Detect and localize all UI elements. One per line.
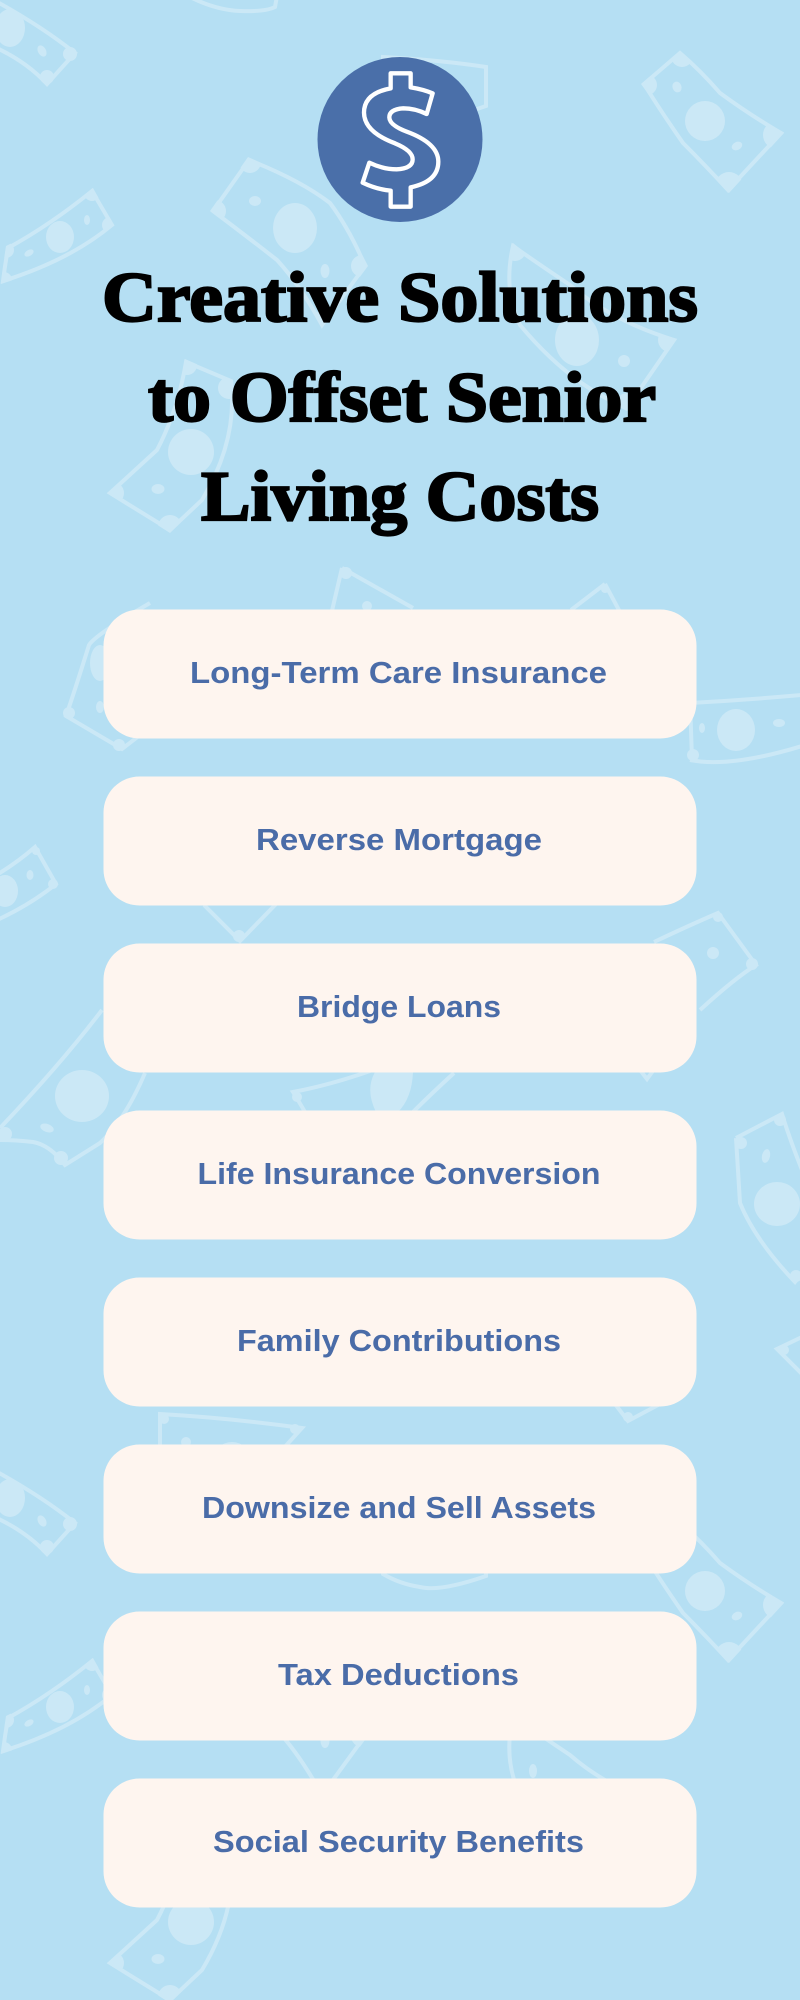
card: Reverse Mortgage [104,776,696,906]
title: to Offset Senior [148,359,656,437]
card: Tax Deductions [104,1612,696,1740]
card: Life Insurance Conversion [104,1110,696,1240]
card: Tax Deductions: Tax Deductions [278,1657,519,1692]
card: Life Insurance Conversion: Life Insurance Conversion [198,1156,600,1191]
icon: dollar sign in circle [318,57,482,222]
title: Living Costs [201,458,599,536]
card: Long-Term Care Insurance: Long-Term Care Insurance [190,655,607,690]
card: Family Contributions [104,1278,696,1406]
title: Creative Solutions [102,259,698,337]
card: Bridge Loans: Bridge Loans [297,989,501,1024]
card: Family Contributions: Family Contributions [237,1323,561,1358]
title [102,259,698,536]
card: Long-Term Care Insurance [104,610,696,738]
card: Reverse Mortgage: Reverse Mortgage [256,822,542,857]
card: Downsize and Sell Assets: Downsize and Sell Assets [202,1490,596,1525]
card: Social Security Benefits [104,1778,696,1908]
card: Social Security Benefits: Social Security Benefits [213,1824,584,1859]
card: Bridge Loans [104,944,696,1072]
card: Downsize and Sell Assets [104,1444,696,1574]
